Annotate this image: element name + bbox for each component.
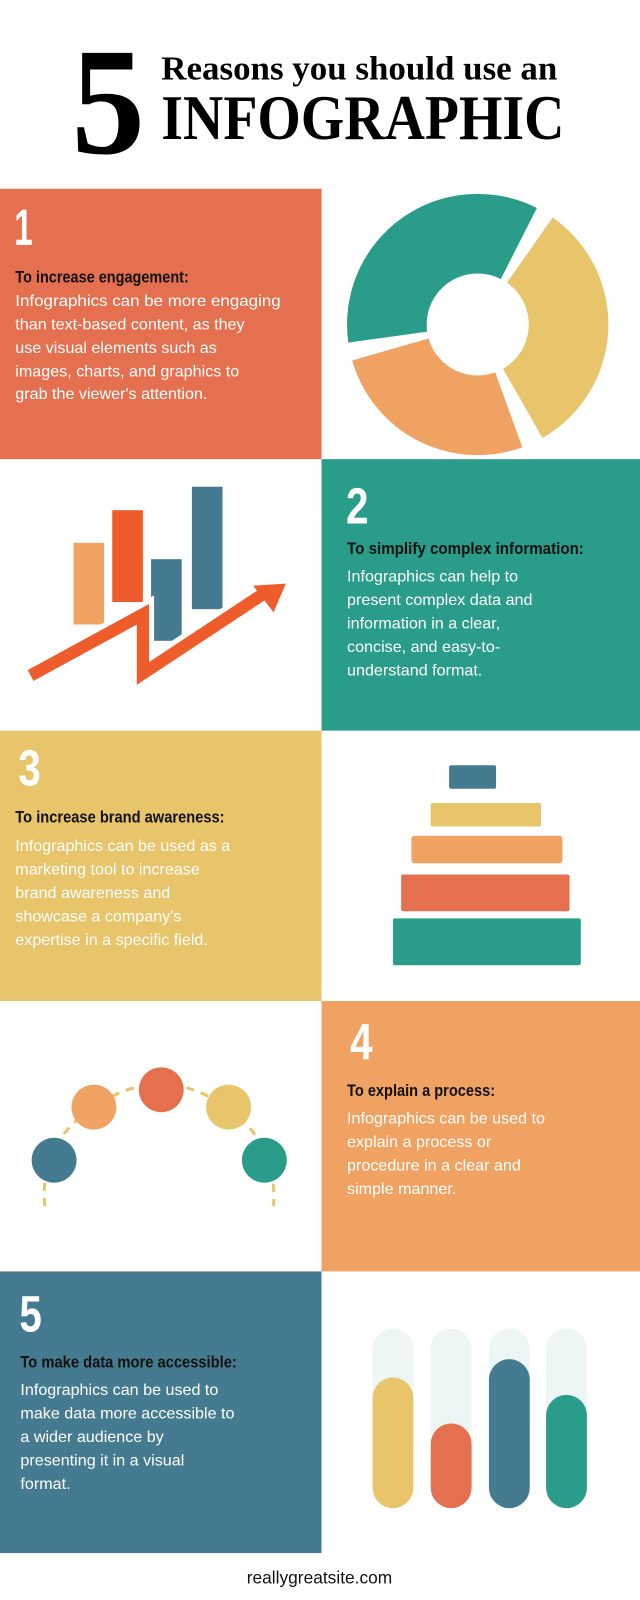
icon: stacked bars — [393, 765, 581, 965]
chart: bars with arrow — [31, 487, 286, 676]
panel 4: process: 4 — [350, 1013, 373, 1070]
panel 4: process: Infographics can be used to — [347, 1109, 545, 1127]
chart: rounded progress bars — [373, 1329, 587, 1508]
panel 3: brand awareness: showcase a company's — [15, 907, 181, 925]
panel 4: process: explain a process or — [347, 1133, 492, 1151]
panel 5: accessible: To make data more accessible: — [20, 1353, 237, 1371]
panel 2: simplify: understand format. — [347, 662, 482, 680]
panel 2: simplify: 2 — [346, 477, 368, 534]
panel 2: simplify: present complex data and — [347, 591, 532, 609]
panel 2: simplify: Infographics can help to — [347, 568, 518, 586]
panel 2: simplify: concise, and easy-to- — [347, 638, 500, 656]
panel 1: engagement: Infographics can be more engaging — [15, 292, 281, 310]
panel 3: brand awareness: marketing tool to increase — [15, 860, 200, 878]
panel 5: accessible — [0, 1271, 322, 1553]
panel 4: process: To explain a process: — [347, 1082, 495, 1100]
icon: process dots — [32, 1067, 287, 1206]
panel 2: simplify: To simplify complex information: — [347, 540, 584, 558]
panel 2: simplify — [322, 459, 640, 731]
title — [71, 18, 564, 187]
panel 5: accessible: make data more accessible to — [20, 1404, 234, 1422]
panel 1: engagement — [0, 189, 322, 459]
panel 1: engagement: 1 — [14, 199, 33, 256]
panel 5: accessible: presenting it in a visual — [20, 1451, 184, 1469]
panel 1: engagement: than text-based content, as they — [15, 316, 246, 334]
panel 4: process — [322, 1001, 640, 1271]
panel 5: accessible: format. — [20, 1475, 71, 1493]
footer url: reallygreatsite.com — [247, 1568, 392, 1588]
panel 3: brand awareness: Infographics can be used as a — [15, 837, 230, 855]
icon: cycle ring — [351, 198, 604, 451]
panel 3: brand awareness: expertise in a specific field. — [15, 931, 208, 949]
panel 3: brand awareness — [0, 731, 322, 1001]
panel 3: brand awareness: 3 — [18, 740, 41, 797]
panel 5: accessible: 5 — [19, 1286, 42, 1343]
panel 1: engagement: use visual elements such as — [15, 339, 217, 357]
panel 1: engagement: images, charts, and graphics to — [15, 363, 239, 381]
panel 1: engagement: grab the viewer's attention. — [15, 385, 207, 403]
panel 3: brand awareness: To increase brand awareness: — [15, 808, 225, 826]
panel 5: accessible: a wider audience by — [20, 1428, 165, 1446]
panel 1: engagement: To increase engagement: — [15, 269, 189, 287]
panel 5: accessible: Infographics can be used to — [20, 1381, 218, 1399]
title: Reasons you should use an — [161, 51, 558, 88]
panel 2: simplify: information in a clear, — [347, 615, 500, 633]
title: INFOGRAPHIC — [161, 83, 564, 153]
title: 5 — [71, 18, 145, 187]
panel 4: process: simple manner. — [347, 1180, 456, 1198]
panel 4: process: procedure in a clear and — [347, 1156, 521, 1174]
panel 3: brand awareness: brand awareness and — [15, 884, 170, 902]
